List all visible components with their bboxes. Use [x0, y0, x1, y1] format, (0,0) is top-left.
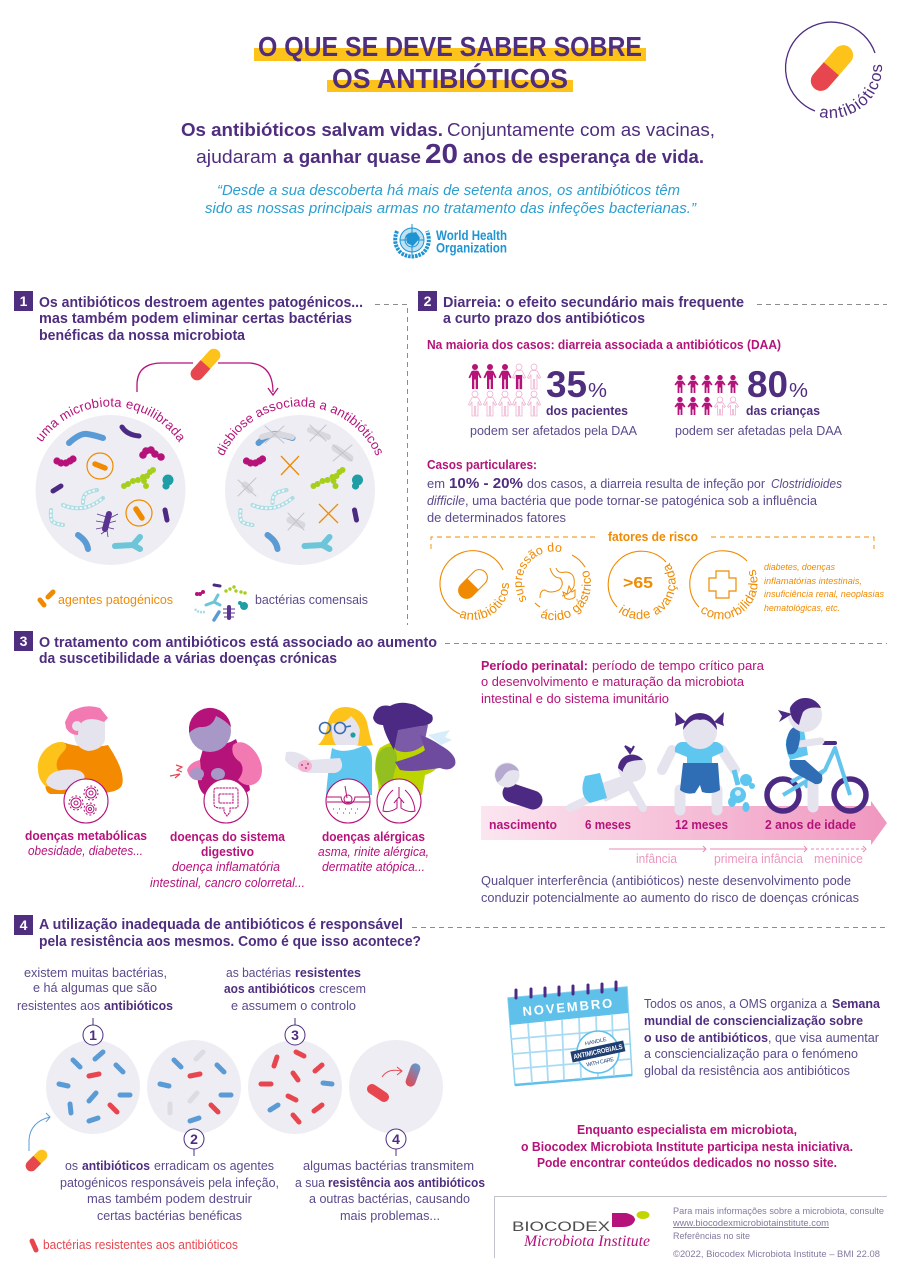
- panel: section 1 microbiota: [14, 291, 408, 625]
- step 3 text: as bactérias: [226, 965, 291, 980]
- icon: risk gastric acid: [515, 542, 591, 620]
- heading section 3: da suscetibilidade a várias doenças crónicas: [39, 651, 337, 667]
- step 1 text: [17, 965, 173, 1013]
- particular cases text: dos casos, a diarreia resulta de infeção por: [527, 476, 766, 491]
- icon: risk antibiotics: antibióticos: [460, 583, 510, 620]
- perinatal text: Período perinatal:: [481, 658, 588, 673]
- stat: 80%: %: [789, 380, 808, 402]
- step 4 text: resistência aos antibióticos: [328, 1175, 485, 1190]
- icon: antibiotics badge: [784, 21, 882, 118]
- particular cases text: em: [427, 476, 445, 491]
- caption: digestive: doença inflamatória: [172, 859, 280, 874]
- illustration: metabolic diseases: [38, 706, 123, 823]
- comorbidities list: insuficiência renal, neoplasias: [764, 589, 884, 600]
- stat: 80%: [675, 364, 842, 438]
- title: [254, 31, 646, 94]
- circle step 4: [349, 1040, 443, 1156]
- WHO week text: Todos os anos, a OMS organiza a: [644, 996, 828, 1011]
- step 3 text: aos antibióticos: [224, 981, 315, 996]
- comorbidities list: hematológicas, etc.: [764, 603, 840, 614]
- comorbidities list: diabetes, doenças: [764, 562, 835, 573]
- panel: footer: [494, 1196, 887, 1260]
- comorbidities list: [764, 562, 884, 614]
- WHO logo: [395, 224, 507, 256]
- icon: calendar november: [508, 982, 632, 1085]
- section number 4: 4: [20, 917, 28, 933]
- step 2 text: mas também podem destruir: [87, 1191, 253, 1206]
- Biocodex participation text: Pode encontrar conteúdos dedicados no nosso site.: [537, 1155, 837, 1170]
- circle step 1: 1: [89, 1027, 97, 1043]
- WHO quote: sido as nossas principais armas no tratamento das infeções bacterianas.”: [205, 201, 697, 217]
- timeline labels: 2 anos de idade: [765, 817, 856, 832]
- perinatal text: intestinal e do sistema imunitário: [481, 691, 669, 706]
- step 4 text: algumas bactérias transmitem: [303, 1158, 474, 1173]
- circle step 3: 3: [291, 1027, 299, 1043]
- logo: Biocodex: [512, 1211, 650, 1250]
- title: OS ANTIBIÓTICOS: [332, 63, 568, 94]
- legend: commensal bacteria: bactérias comensais: [255, 592, 368, 607]
- caption: digestive: digestivo: [201, 844, 254, 859]
- timeline labels: [489, 817, 856, 832]
- heading section 2: a curto prazo dos antibióticos: [443, 311, 645, 327]
- WHO week text: [644, 996, 881, 1078]
- WHO logo: World Health: [436, 227, 507, 243]
- section number 1: [14, 291, 33, 311]
- stat: 80%: 80: [747, 364, 788, 405]
- WHO week text: , que visa aumentar: [768, 1030, 880, 1045]
- step 2 text: [60, 1158, 279, 1223]
- icon: risk comorbidities: [689, 550, 758, 620]
- circle step 2: 2: [190, 1131, 198, 1147]
- caption: allergic: asma, rinite alérgica,: [318, 844, 429, 859]
- step 4 text: a sua: [295, 1175, 326, 1190]
- step 3 text: [224, 965, 366, 1013]
- icon: calendar november: HANDLE: [585, 1037, 608, 1047]
- step 1 text: resistentes aos: [17, 998, 100, 1013]
- interference text: conduzir potencialmente ao aumento do risco de doenças crónicas: [481, 890, 859, 905]
- pictogram: children 80%: [674, 375, 738, 415]
- section number 3: [14, 631, 33, 651]
- particular cases text: Casos particulares:: [427, 457, 537, 472]
- caption: metabolic: [25, 828, 147, 858]
- WHO quote: [205, 183, 697, 217]
- panel: header: [181, 21, 882, 258]
- heading section 3: O tratamento com antibióticos está associado ao aumento: [39, 635, 437, 651]
- heading section 3: [39, 635, 437, 667]
- icon: calendar november: ANTIMICROBIALS: [573, 1044, 624, 1061]
- heading section 1: Os antibióticos destroem agentes patogénicos...: [39, 295, 363, 311]
- heading section 4: A utilização inadequada de antibióticos é responsável: [39, 917, 403, 933]
- particular cases text: 10% - 20%: [449, 475, 523, 492]
- panel: section 3 chronic diseases: [14, 631, 887, 905]
- intro text: Conjuntamente com as vacinas,: [447, 120, 715, 140]
- perinatal text: [481, 658, 765, 706]
- illustration: child on bike: [767, 698, 866, 811]
- step 4 text: [295, 1158, 485, 1223]
- step 4 text: a outras bactérias, causando: [309, 1191, 470, 1206]
- step 3 text: crescem: [319, 981, 366, 996]
- footer text: ©2022, Biocodex Microbiota Institute – BMI 22.08: [673, 1249, 880, 1260]
- life stage arrows: meninice: [814, 851, 863, 866]
- intro text: a ganhar quase: [283, 147, 421, 167]
- intro text: anos de esperança de vida.: [463, 147, 704, 167]
- step 1 text: antibióticos: [104, 998, 173, 1013]
- logo: Biocodex: BIOCODEX: [512, 1219, 610, 1234]
- WHO week text: a consciencialização para o fenómeno: [644, 1046, 858, 1061]
- stat: 35%: 35: [546, 364, 587, 405]
- particular cases text: Clostridioides: [771, 476, 842, 491]
- timeline labels: nascimento: [489, 817, 557, 832]
- circle: dysbiosis: [217, 397, 382, 565]
- step 2 text: patogénicos responsáveis pela infeção,: [60, 1175, 279, 1190]
- panel: section 2 diarrhoea: [418, 291, 887, 620]
- caption: metabolic: doenças metabólicas: [25, 828, 147, 843]
- life stage arrows: infância: [636, 851, 678, 866]
- WHO quote: “Desde a sua descoberta há mais de setenta anos, os antibióticos têm: [217, 183, 680, 199]
- illustration: allergic diseases sneezing woman: [373, 703, 455, 823]
- Biocodex participation text: Enquanto especialista em microbiota,: [577, 1122, 797, 1137]
- heading section 4: pela resistência aos mesmos. Como é que isso acontece?: [39, 934, 421, 950]
- arrow: antibiotic transition: [137, 346, 278, 395]
- step 1 text: e há algumas que são: [33, 980, 157, 995]
- life stage arrows: primeira infância: [714, 851, 804, 866]
- circle: balanced microbiota: uma microbiota equilibrada: [36, 398, 184, 442]
- WHO week text: Semana: [832, 996, 881, 1011]
- illustration: allergic diseases blonde woman: [285, 707, 373, 823]
- panel: section 4 resistance: [14, 915, 887, 1252]
- heading section 1: benéficas da nossa microbiota: [39, 328, 246, 344]
- stat: 35%: podem ser afetados pela DAA: [470, 423, 637, 438]
- step 3 text: e assumem o controlo: [231, 998, 356, 1013]
- risk factors heading: [431, 529, 874, 549]
- caption: allergic: [318, 829, 429, 874]
- step 2 text: certas bactérias benéficas: [97, 1208, 242, 1223]
- Biocodex participation text: o Biocodex Microbiota Institute participa nesta iniciativa.: [521, 1139, 853, 1154]
- comorbidities list: inflamatórias intestinais,: [764, 576, 862, 587]
- legend: pathogens: agentes patogénicos: [58, 592, 173, 607]
- caption: digestive: [150, 829, 305, 890]
- section number 2: 2: [424, 293, 432, 309]
- circle step 3: [248, 1018, 342, 1134]
- WHO logo: Organization: [436, 240, 507, 256]
- footer text: Referências no site: [673, 1231, 750, 1242]
- caption: allergic: doenças alérgicas: [322, 829, 425, 844]
- footer text: Para mais informações sobre a microbiota, consulte: [673, 1206, 884, 1217]
- icon: calendar november: WITH CARE: [586, 1057, 615, 1069]
- heading section 1: [39, 295, 363, 344]
- Biocodex participation text: [521, 1122, 853, 1170]
- illustration: newborn: [494, 762, 533, 800]
- WHO week text: mundial de consciencialização sobre: [644, 1013, 863, 1028]
- stat: 80%: podem ser afetadas pela DAA: [675, 423, 842, 438]
- icon: risk age: >65: [623, 575, 653, 592]
- WHO week text: o uso de antibióticos: [644, 1030, 768, 1045]
- step 2 text: os: [65, 1158, 78, 1173]
- section number 3: 3: [20, 633, 28, 649]
- step 4 text: mais problemas...: [340, 1208, 440, 1223]
- timeline labels: 12 meses: [675, 817, 728, 832]
- perinatal text: período de tempo crítico para: [592, 658, 765, 673]
- step 3 text: resistentes: [295, 965, 361, 980]
- caption: digestive: intestinal, cancro colorretal...: [150, 875, 305, 890]
- icon: risk gastric acid: ácido gástrico: [540, 570, 591, 620]
- stat: 35%: [470, 364, 637, 438]
- arrow: antibiotic enters: [23, 1113, 50, 1174]
- timeline labels: 6 meses: [585, 817, 631, 832]
- heading section 2: Diarreia: o efeito secundário mais frequente: [443, 295, 744, 311]
- circle: dysbiosis: disbiose associada a antibióticos: [217, 397, 382, 456]
- legend: commensal bacteria: [195, 585, 368, 620]
- pictogram: adults 35%: [468, 364, 540, 416]
- interference text: Qualquer interferência (antibióticos) neste desenvolvimento pode: [481, 873, 851, 888]
- caption: digestive: doenças do sistema: [170, 829, 286, 844]
- circle step 1: [46, 1018, 140, 1134]
- icon: antibiotics badge: antibióticos: [820, 64, 882, 118]
- illustration: crawling baby: [570, 746, 646, 808]
- illustration: toddler: [662, 712, 755, 812]
- step 1 text: existem muitas bactérias,: [24, 965, 167, 980]
- intro text: ajudaram: [196, 147, 277, 167]
- risk factors heading: fatores de risco: [608, 529, 698, 544]
- WHO week text: global da resistência aos antibióticos: [644, 1063, 850, 1078]
- particular cases text: de determinados fatores: [427, 510, 566, 525]
- icon: risk gastric acid: supressão do: [515, 542, 562, 602]
- icon: risk comorbidities: comorbilidades: [701, 570, 758, 620]
- footer text: www.biocodexmicrobiotainstitute.com: [672, 1218, 829, 1229]
- logo: Biocodex: Microbiota Institute: [523, 1233, 650, 1250]
- timeline band arrow: [481, 801, 887, 845]
- heading section 1: mas também podem eliminar certas bactérias: [39, 311, 352, 327]
- intro text: Os antibióticos salvam vidas.: [181, 120, 443, 140]
- intro text: [181, 120, 715, 169]
- circle step 4: 4: [392, 1131, 400, 1147]
- section number 1: 1: [20, 293, 28, 309]
- particular cases text: , uma bactéria que pode tornar-se patogénica sob a influência: [465, 493, 818, 508]
- icon: risk antibiotics: [439, 550, 510, 620]
- interference text: [481, 873, 859, 905]
- legend: resistant bacteria: bactérias resistentes aos antibióticos: [43, 1238, 238, 1252]
- stat: 35%: dos pacientes: [546, 403, 628, 418]
- subheading DAA: Na maioria dos casos: diarreia associada a antibióticos (DAA): [427, 337, 781, 352]
- heading section 2: [443, 295, 744, 327]
- particular cases text: difficile: [427, 493, 465, 508]
- section number 2: [418, 291, 437, 311]
- title: O QUE SE DEVE SABER SOBRE: [258, 31, 642, 62]
- intro text: 20: [425, 138, 458, 169]
- icon: calendar november: NOVEMBRO: [522, 995, 613, 1019]
- caption: metabolic: obesidade, diabetes...: [28, 843, 143, 858]
- circle: balanced microbiota: [36, 398, 186, 565]
- stat: 80%: das crianças: [746, 403, 820, 418]
- footer text: [672, 1206, 884, 1260]
- life stage arrows: [609, 846, 866, 866]
- particular cases text: [427, 457, 842, 525]
- step 2 text: antibióticos: [82, 1158, 150, 1173]
- stat: 35%: %: [588, 380, 607, 402]
- illustration: digestive diseases: [170, 708, 262, 823]
- heading section 4: [39, 917, 421, 950]
- section number 4: [14, 915, 33, 935]
- perinatal text: o desenvolvimento e maturação da microbiota: [481, 674, 745, 689]
- circle step 2: [147, 1040, 241, 1156]
- icon: risk age: idade avançada: [618, 562, 678, 620]
- caption: allergic: dermatite atópica...: [322, 859, 425, 874]
- step 2 text: erradicam os agentes: [154, 1158, 274, 1173]
